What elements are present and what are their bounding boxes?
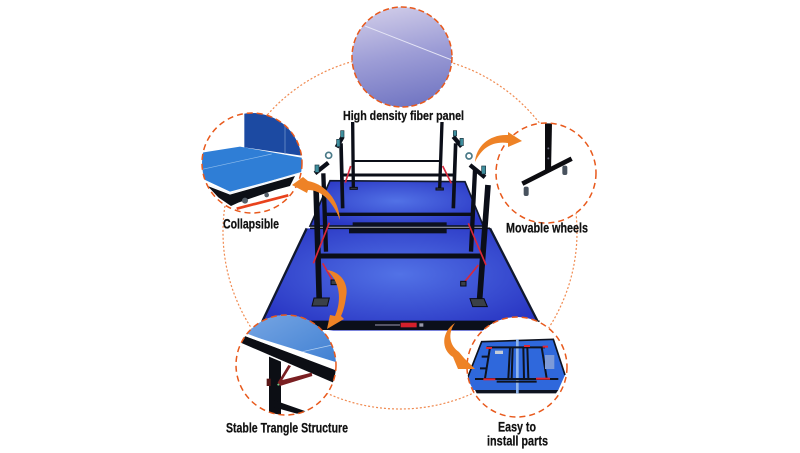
table edge photo (241, 315, 336, 414)
panel photo (352, 7, 452, 107)
blue clamps (315, 131, 486, 174)
white backing (496, 123, 596, 223)
white backing (467, 317, 567, 417)
white backing (236, 315, 336, 415)
dashed ring (202, 113, 302, 213)
arrow: to install parts (444, 323, 475, 369)
feature: easy to install parts (467, 317, 567, 417)
label: movable wheels: Movable wheels (506, 220, 588, 236)
feature: collapsible (202, 110, 308, 213)
dashed ring (496, 123, 596, 223)
feature: movable wheels (496, 123, 596, 223)
packed parts photo (467, 339, 565, 393)
arrow: to movable wheels (475, 132, 522, 162)
back table tray (310, 181, 483, 226)
feature: high density fiber panel (352, 7, 452, 107)
center rails (349, 222, 447, 233)
dashed ring (352, 7, 452, 107)
label: easy to install parts (487, 420, 548, 448)
dashed ring (236, 315, 336, 415)
label: easy to install parts: install parts (487, 434, 548, 448)
infographic canvas (201, 6, 597, 449)
front table tray (262, 228, 540, 331)
table photo (202, 110, 308, 209)
steel frame legs and crossbars (310, 122, 490, 303)
label: easy to install parts: Easy to (498, 420, 536, 434)
floor feet (312, 187, 487, 307)
wheeled leg photo (522, 123, 572, 196)
folded table product photo (262, 122, 540, 331)
label: stable trangle structure: Stable Trangle Structure (226, 420, 348, 436)
label: collapsible: Collapsible (223, 216, 279, 232)
dotted connector ring (223, 55, 577, 409)
white backing (202, 113, 302, 213)
red straps (313, 166, 486, 283)
feature: stable triangle structure (236, 310, 340, 415)
label: high density fiber panel: High density fiber panel (343, 108, 464, 123)
arrow: to collapsible (292, 177, 340, 220)
arrow: to stable structure (327, 270, 347, 329)
dashed ring (467, 317, 567, 417)
brand plate (375, 323, 423, 327)
